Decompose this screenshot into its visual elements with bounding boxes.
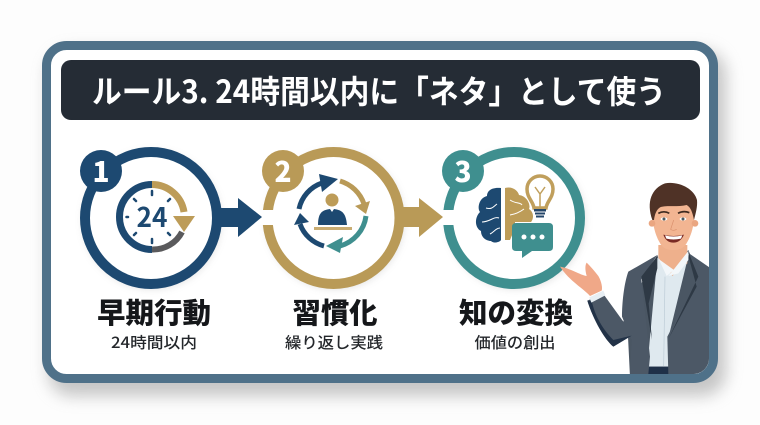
presenter character: [560, 183, 713, 377]
step 3: knowledge conversion: [436, 150, 585, 353]
panel frame border: [46, 46, 714, 378]
step 1 number badge: 1: [92, 151, 110, 191]
step 1 heading: 早期行動: [97, 291, 211, 332]
step 1: early action: [80, 150, 221, 353]
panel background: [46, 46, 714, 378]
arrow 2: [402, 198, 443, 237]
step 2: habit: [255, 150, 404, 353]
step 3 subtext: 価値の創出: [474, 331, 556, 353]
title bar: ルール3. 24時間以内に「ネタ」として使う: [92, 67, 666, 113]
step 2 subtext: 繰り返し実践: [285, 331, 384, 353]
step 2 ring: [255, 151, 404, 289]
icon: cycle with person: [294, 174, 370, 253]
icon: brain, lightbulb and speech bubble: [476, 176, 553, 258]
step 3 ring: [436, 151, 585, 289]
step 3 number badge: 3: [454, 151, 472, 191]
step 2 number badge: [262, 150, 304, 192]
step 3 heading: 知の変換: [459, 291, 573, 332]
step 2 number badge: 2: [274, 151, 292, 191]
icon: 24-hour clock: [120, 184, 195, 250]
step 3 number badge: [442, 150, 484, 192]
step 1 ring: [83, 151, 221, 289]
step 1 subtext: 24時間以内: [111, 331, 197, 353]
step 1 number badge: [80, 150, 122, 192]
step 2 heading: 習慣化: [292, 291, 378, 332]
arrow 1: [220, 198, 262, 237]
icon: 24-hour clock: 24: [136, 196, 168, 235]
frame shadow: [48, 50, 726, 396]
infographic: [40, 41, 734, 404]
